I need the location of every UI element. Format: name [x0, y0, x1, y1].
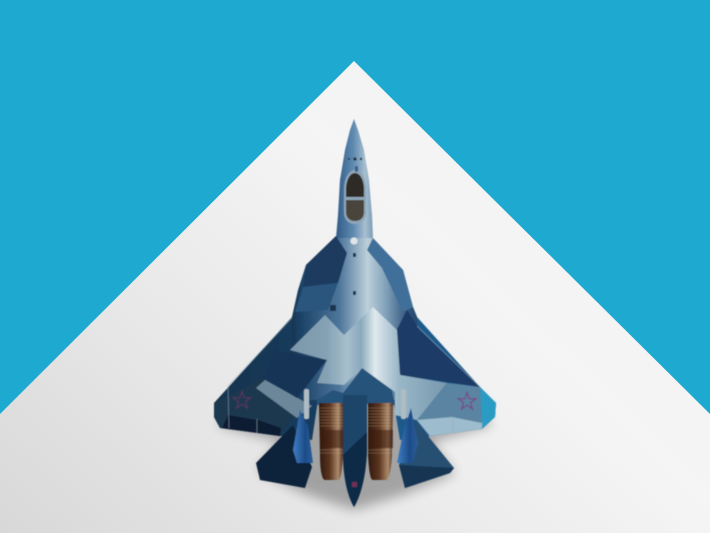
fuselage and shoulders: [292, 236, 420, 400]
right intake post: [401, 389, 406, 419]
canopy aft glass: [346, 200, 364, 221]
right wing grey panel: [417, 383, 482, 436]
tail cone: [343, 395, 367, 507]
left mid camo: [295, 283, 338, 312]
canopy frame: [344, 170, 366, 224]
nose sensors: [348, 157, 362, 172]
left wing trailing shadow: [222, 415, 281, 436]
right ventral fin: [397, 408, 418, 463]
left star: ★: [232, 388, 252, 414]
right dark camo: [395, 310, 480, 387]
spine disc: [350, 237, 358, 245]
right tail lower facet: [399, 465, 454, 488]
left wing: [214, 317, 330, 440]
center dark chevron: [317, 368, 395, 405]
fighter jet: [214, 119, 496, 507]
left wing outboard panel: [214, 378, 296, 436]
tail cone marker: [352, 482, 357, 487]
jet shadow: [218, 340, 492, 510]
canopy: [346, 173, 364, 197]
right shoulder camo: [367, 238, 413, 312]
light chevron camo: [290, 307, 447, 420]
right engine dark band: [368, 430, 393, 448]
right wing light strip: [417, 417, 482, 436]
left engine nozzle: [319, 403, 343, 480]
right engine ribs: [368, 408, 393, 453]
spine marks: [330, 253, 356, 311]
left engine ribs: [320, 408, 343, 453]
left intake post: [304, 389, 309, 419]
left shoulder dark camo: [303, 236, 347, 287]
right wing cyan tip: [480, 387, 496, 429]
left ventral fin: [293, 410, 313, 463]
left grey stripe: [256, 380, 312, 418]
right tail upper facet: [399, 420, 454, 488]
right engine nozzle: [368, 403, 393, 480]
right star: ★: [457, 389, 477, 415]
left engine dark band: [320, 430, 343, 448]
wing edge lines: [228, 318, 482, 433]
left dark camo: [263, 350, 327, 398]
tail cone lower: [343, 432, 367, 507]
left tail: [256, 425, 312, 488]
nose: [336, 119, 373, 238]
right wing: [380, 307, 496, 440]
